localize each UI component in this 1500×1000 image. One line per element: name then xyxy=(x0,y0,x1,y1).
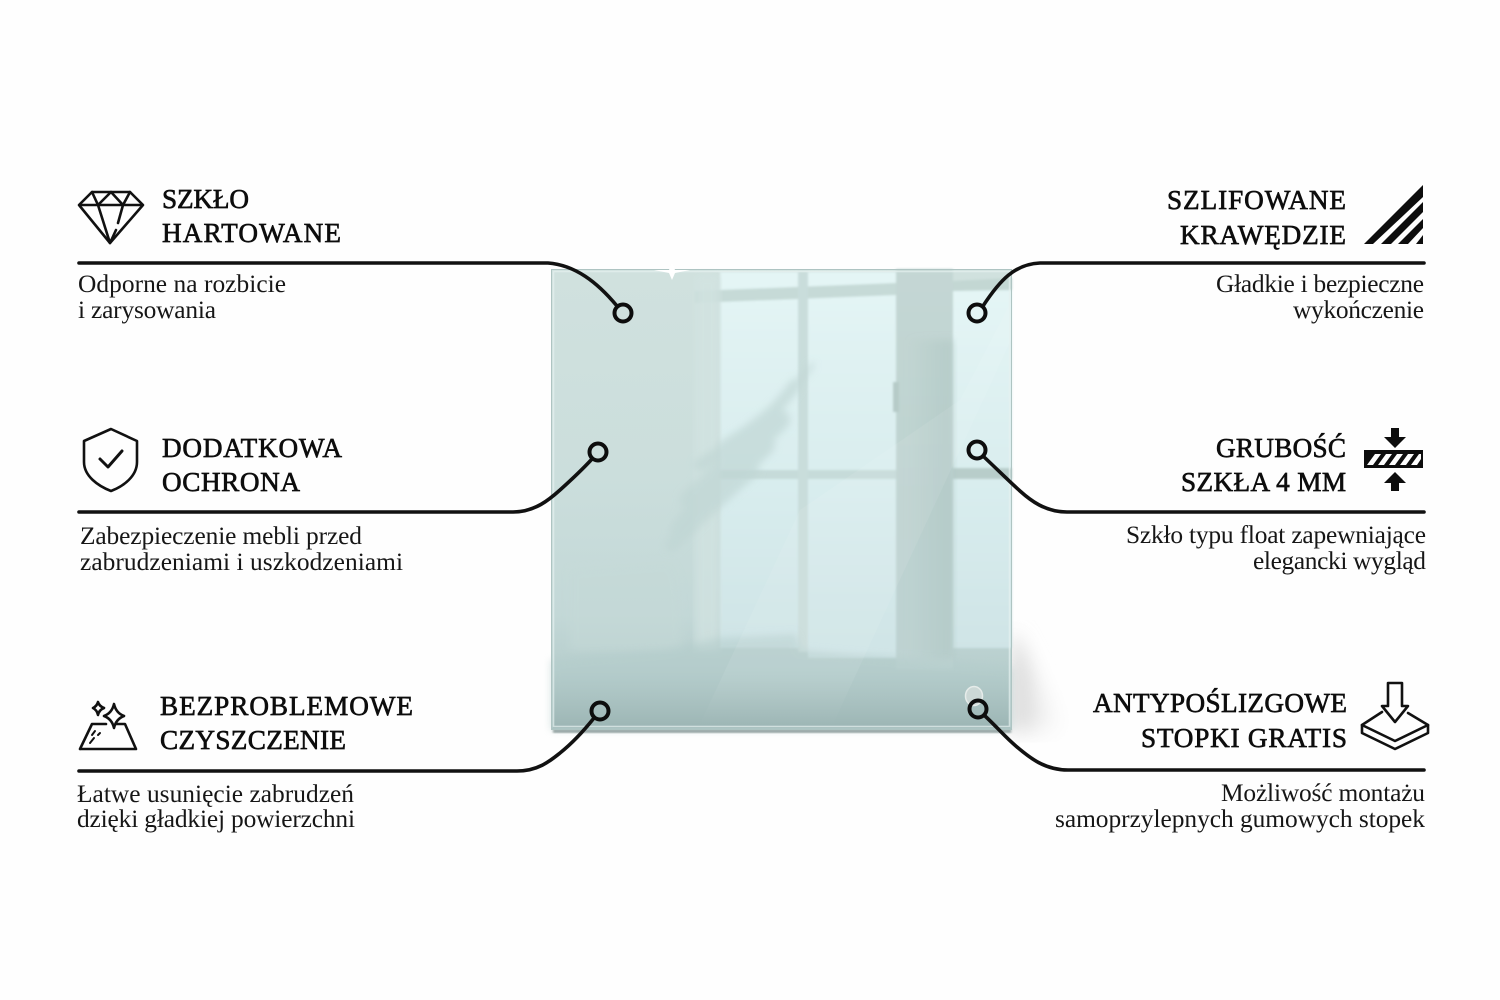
description: Gładkie i bezpieczne xyxy=(1216,270,1424,298)
glass panel with window reflection xyxy=(551,262,1012,730)
heading xyxy=(160,691,413,755)
heading: BEZPROBLEMOWE xyxy=(160,691,413,721)
description: Szkło typu float zapewniające xyxy=(1126,521,1426,549)
heading: HARTOWANE xyxy=(162,218,341,248)
description xyxy=(80,522,403,576)
connector line xyxy=(984,715,1424,770)
callout: bezproblemowe czyszczenie xyxy=(77,691,608,833)
description: zabrudzeniami i uszkodzeniami xyxy=(80,548,403,576)
description: elegancki wygląd xyxy=(1253,547,1426,575)
description xyxy=(1216,270,1424,324)
description xyxy=(1055,779,1425,833)
icon: thickness arrows xyxy=(1364,428,1423,491)
description xyxy=(77,780,355,833)
callout: dodatkowa ochrona xyxy=(79,429,606,576)
heading: DODATKOWA xyxy=(162,433,342,463)
description: dzięki gładkiej powierzchni xyxy=(77,805,355,833)
heading: OCHRONA xyxy=(162,467,300,497)
heading: KRAWĘDZIE xyxy=(1180,220,1346,250)
description: i zarysowania xyxy=(78,296,216,324)
connector line xyxy=(983,263,1424,306)
icon: sparkling surface xyxy=(80,702,136,749)
connector ring xyxy=(968,304,986,322)
reflection: table xyxy=(551,634,1012,730)
icon: arrow on plate xyxy=(1362,683,1428,749)
heading xyxy=(1181,433,1346,497)
callout: grubość szkła xyxy=(968,428,1426,575)
bottom shade xyxy=(553,670,1010,728)
description: wykończenie xyxy=(1293,296,1424,324)
icon: diamond xyxy=(79,192,143,243)
heading xyxy=(162,433,342,497)
connector ring xyxy=(590,444,606,460)
callout: antypoślizgowe stopki xyxy=(970,683,1428,833)
connector line xyxy=(79,718,594,771)
description: samoprzylepnych gumowych stopek xyxy=(1055,805,1425,833)
callout: szlifowane krawędzie xyxy=(968,185,1424,324)
reflection: plant xyxy=(672,365,812,545)
reflection: column shade xyxy=(908,340,953,660)
description: Łatwe usunięcie zabrudzeń xyxy=(77,780,354,808)
heading xyxy=(162,184,341,248)
connector ring xyxy=(614,304,632,322)
description: Możliwość montażu xyxy=(1221,779,1425,807)
description: Zabezpieczenie mebli przed xyxy=(80,522,362,550)
glass bevel edge xyxy=(554,272,1010,726)
connector line xyxy=(79,263,617,306)
description: Odporne na rozbicie xyxy=(78,270,286,298)
heading: SZKŁO xyxy=(162,184,249,214)
anti-slip foot xyxy=(966,686,982,706)
icon: shield xyxy=(84,429,137,491)
connector ring xyxy=(968,442,986,458)
callout: szkło hartowane xyxy=(78,184,632,324)
connector line xyxy=(79,459,592,512)
reflection: window panes xyxy=(695,269,1012,669)
icon: diagonal stripes xyxy=(1364,185,1423,244)
heading: STOPKI GRATIS xyxy=(1141,723,1347,753)
heading xyxy=(1093,688,1347,753)
reflection: curtain xyxy=(695,275,720,650)
reflection: vase xyxy=(570,562,682,650)
connector ring xyxy=(592,702,608,720)
glint xyxy=(654,262,690,280)
heading: CZYSZCZENIE xyxy=(160,725,346,755)
heading: ANTYPOŚLIZGOWE xyxy=(1093,688,1347,718)
heading: SZKŁA 4 MM xyxy=(1181,467,1346,497)
heading: SZLIFOWANE xyxy=(1167,185,1346,215)
reflection: diagonal sheen xyxy=(700,300,1012,724)
connector ring xyxy=(970,700,986,718)
description xyxy=(78,270,286,324)
heading xyxy=(1167,185,1346,250)
connector line xyxy=(983,456,1424,512)
description xyxy=(1126,521,1426,575)
heading: GRUBOŚĆ xyxy=(1216,433,1346,463)
panel shadow xyxy=(553,630,1064,733)
